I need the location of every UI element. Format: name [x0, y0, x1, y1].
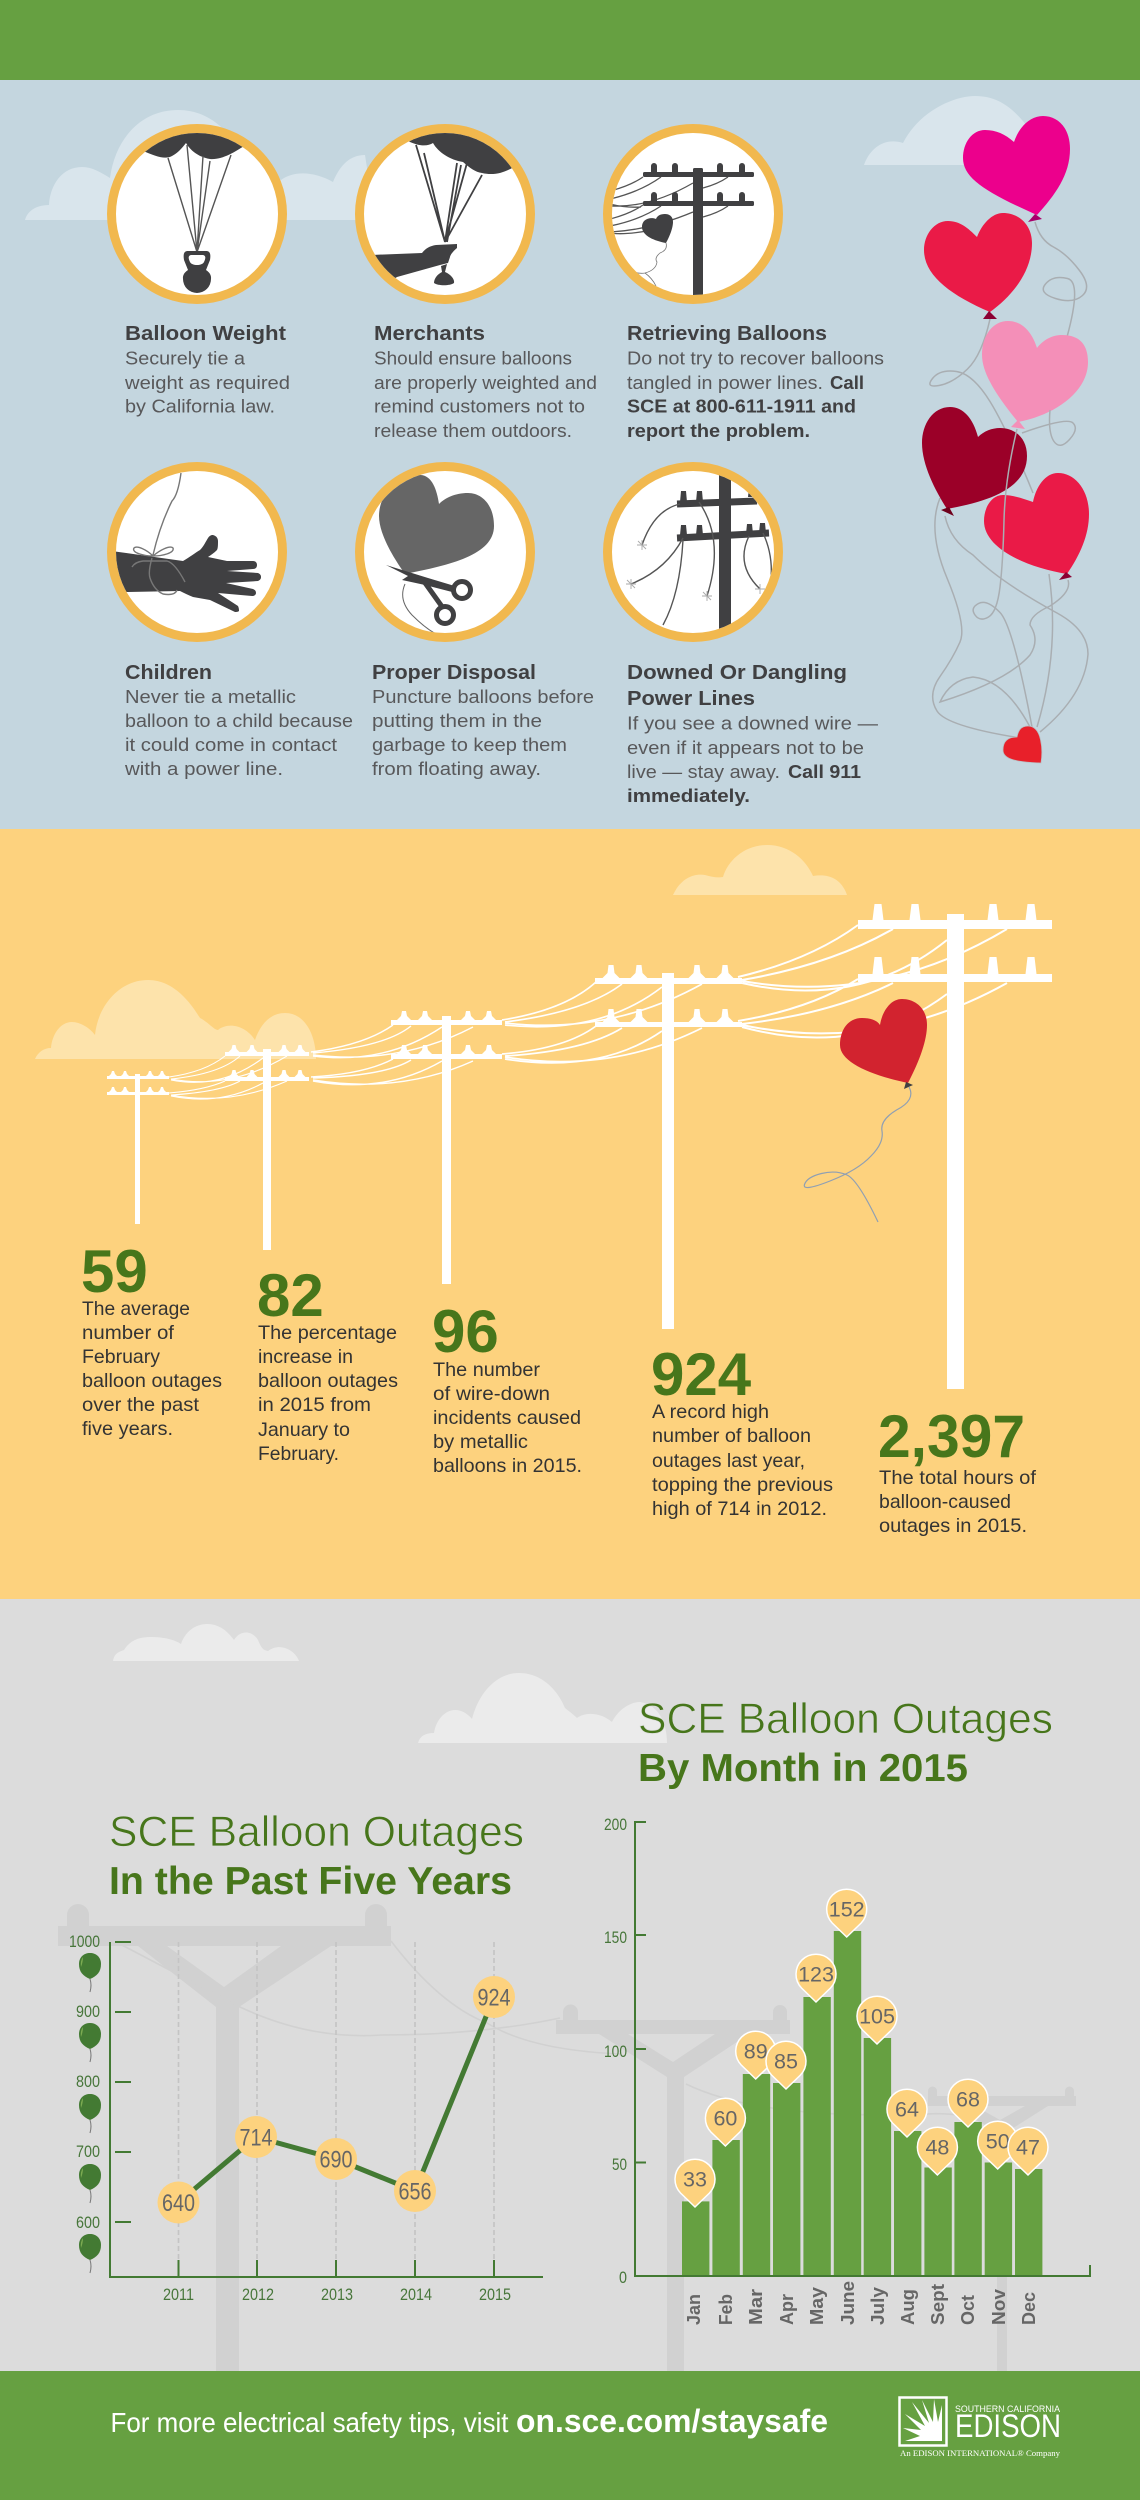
data point markers: 924 — [478, 1984, 510, 2012]
stat: 59: February — [82, 1346, 160, 1368]
balloon: dark red heart — [922, 407, 1027, 516]
heading — [627, 661, 847, 710]
value pins: 105 — [859, 2004, 895, 2028]
month labels: June — [838, 2281, 858, 2325]
stat: 82: balloon outages — [258, 1370, 398, 1392]
x axis labels: 2014 — [400, 2285, 432, 2304]
stat: 82 — [257, 1262, 398, 1465]
stat: 2,397: 2,397 — [878, 1403, 1025, 1470]
panel: balloon safety tips — [0, 80, 1140, 829]
body text — [627, 348, 884, 441]
body text: are properly weighted and — [374, 372, 597, 393]
stat: 96 — [432, 1298, 582, 1477]
stat: 924: A record high — [652, 1401, 769, 1423]
body text — [124, 348, 290, 416]
cloud: upper — [673, 845, 847, 895]
y axis labels: 800 — [76, 2072, 100, 2091]
data point markers: 714 — [240, 2124, 272, 2152]
stat: 82: 82 — [257, 1262, 324, 1329]
value pins: 89 — [744, 2040, 768, 2064]
month labels: May — [807, 2287, 827, 2325]
power pole 5 — [858, 904, 1052, 1389]
body text: balloon to a child because — [125, 710, 353, 731]
logo: Southern California Edison: SOUTHERN CALIFORNIA — [955, 2404, 1060, 2414]
body text: even if it appears not to be — [627, 737, 864, 758]
icon: pole with dangling wires — [626, 470, 771, 635]
cloud: left — [35, 980, 316, 1059]
x axis labels: 2011 — [163, 2285, 194, 2304]
gridlines — [178, 1942, 494, 2262]
month labels: Oct — [958, 2295, 978, 2325]
month labels: Nov — [989, 2289, 1009, 2325]
body text: release them outdoors. — [374, 420, 572, 441]
value pins: 60 — [713, 2106, 737, 2130]
balloon: red heart — [924, 213, 1032, 319]
y axis labels: 700 — [76, 2142, 100, 2161]
month labels: Mar — [746, 2289, 766, 2325]
body text: If you see a downed wire — — [627, 712, 879, 734]
cloud: upper left — [113, 1624, 299, 1661]
y axis labels: 600 — [76, 2213, 100, 2232]
body text: immediately. — [627, 785, 750, 806]
value pins: 33 — [683, 2168, 707, 2192]
axes — [635, 1822, 1090, 2276]
icon: heart balloon tangled on power pole — [610, 163, 754, 302]
heading: Power Lines — [627, 687, 755, 710]
stat: 59: 59 — [81, 1238, 148, 1305]
balloon: red heart lower — [984, 473, 1089, 580]
body text: Do not try to recover balloons — [627, 348, 884, 368]
value pins: 123 — [798, 1962, 834, 1986]
icons: green balloons — [79, 1953, 101, 2273]
body text: Securely tie a — [125, 348, 246, 368]
value pins: 50 — [986, 2130, 1010, 2154]
stat: 82: The percentage — [258, 1322, 397, 1344]
title: In the Past Five Years — [109, 1860, 512, 1903]
title: SCE Balloon Outages — [109, 1808, 524, 1856]
balloon: magenta heart — [963, 116, 1070, 222]
title: SCE Balloon Outages — [638, 1695, 1053, 1743]
data point markers: 690 — [320, 2146, 352, 2174]
body text: garbage to keep them — [372, 734, 567, 755]
stat: 924 — [651, 1341, 833, 1520]
stat: 2,397 — [878, 1403, 1037, 1537]
body text: report the problem. — [627, 420, 810, 441]
tip: downed power lines — [608, 466, 879, 806]
y axis labels — [604, 1815, 627, 2287]
stat: 96: of wire-down — [433, 1383, 550, 1405]
value pins: 48 — [925, 2136, 949, 2160]
body text: weight as required — [124, 372, 290, 393]
heading: Balloon Weight — [125, 322, 286, 345]
cloud: left — [25, 110, 375, 220]
stat: 59: number of — [82, 1322, 175, 1344]
heading: Children — [125, 661, 212, 684]
data point markers — [158, 1976, 515, 2224]
cloud: center — [418, 1673, 667, 1743]
x axis labels: 2012 — [242, 2285, 274, 2304]
tip: balloon weight — [112, 120, 290, 416]
value pins: 85 — [774, 2050, 798, 2074]
body text: live — stay away. — [627, 761, 780, 782]
stat: 2,397: outages in 2015. — [879, 1515, 1027, 1537]
tip: retrieving balloons — [608, 128, 884, 441]
background power poles — [58, 1904, 1076, 2371]
logo: Southern California Edison: An EDISON INTERNATIONAL® Company — [900, 2449, 1060, 2458]
value pins: 68 — [956, 2088, 980, 2112]
body text — [627, 712, 879, 806]
stat: 924: number of balloon — [652, 1425, 811, 1447]
body text: Never tie a metallic — [125, 686, 296, 707]
footer call to action: on.sce.com/staysafe — [516, 2403, 828, 2439]
icon: red heart balloon — [804, 999, 927, 1222]
value pins — [675, 1889, 1048, 2207]
month labels: Jan — [684, 2294, 704, 2325]
x axis labels — [163, 2285, 511, 2304]
month labels — [684, 2281, 1039, 2325]
heading: Proper Disposal — [372, 661, 536, 684]
y axis labels: 150 — [604, 1928, 627, 1947]
stat: 2,397: balloon-caused — [879, 1491, 1011, 1513]
stat: 59: balloon outages — [82, 1370, 222, 1392]
icon: hand holding balloons — [375, 133, 512, 286]
data point markers: 656 — [398, 2178, 432, 2206]
stat: 96: balloons in 2015. — [433, 1455, 582, 1477]
body text — [124, 686, 353, 779]
body text — [372, 686, 594, 779]
title — [109, 1808, 524, 1903]
icon: scissors puncturing heart balloon — [379, 475, 494, 634]
heading: Retrieving Balloons — [627, 322, 827, 345]
y axis labels: 900 — [76, 2002, 100, 2021]
tip: merchants — [360, 120, 597, 441]
power pole 4 — [595, 965, 742, 1329]
footer call to action: For more electrical safety tips, visit — [110, 2407, 509, 2438]
line series — [178, 1997, 494, 2202]
y axis labels: 0 — [619, 2268, 627, 2287]
y axis labels: 50 — [612, 2155, 627, 2174]
body text: it could come in contact — [125, 734, 337, 755]
body text: with a power line. — [124, 758, 283, 779]
x axis labels: 2013 — [321, 2285, 353, 2304]
y axis labels: 100 — [604, 2042, 627, 2061]
icon: balloon string tied to child's hand — [110, 473, 261, 612]
stat: 96: 96 — [432, 1298, 499, 1365]
value pins: 47 — [1016, 2136, 1040, 2160]
stat: 924: 924 — [651, 1341, 752, 1408]
month labels: Feb — [716, 2294, 736, 2325]
stat: 59: over the past — [82, 1394, 200, 1416]
balloon: pink heart — [982, 321, 1088, 429]
body text: Should ensure balloons — [374, 348, 572, 368]
small red heart weight — [1003, 726, 1042, 763]
balloon strings — [930, 222, 1088, 739]
body text: remind customers not to — [374, 396, 585, 416]
stat: 59 — [81, 1238, 222, 1440]
month labels: Sept — [928, 2284, 948, 2325]
chart: outages by month in 2015 — [604, 1695, 1090, 2325]
power pole 3 — [391, 1011, 502, 1284]
value pins: 152 — [829, 1898, 865, 1922]
axes — [110, 1942, 543, 2277]
stat: 96: by metallic — [433, 1431, 528, 1453]
logo: Southern California Edison — [900, 2398, 1061, 2458]
stat: 82: January to — [258, 1419, 350, 1441]
cloud: right — [864, 96, 1030, 165]
month labels: July — [868, 2287, 888, 2325]
title: By Month in 2015 — [638, 1747, 968, 1790]
chart: outages in the past five years — [69, 1808, 543, 2304]
icon: balloons with kettlebell weight — [145, 133, 242, 293]
data point markers: 640 — [162, 2190, 195, 2217]
stat: 924: outages last year, — [652, 1450, 805, 1472]
footer band — [0, 2371, 1140, 2500]
month labels: Apr — [777, 2294, 797, 2325]
tip: proper disposal — [360, 466, 594, 779]
body text: Call — [830, 372, 864, 393]
panel: outage statistics — [0, 829, 1140, 1599]
tip: children — [110, 466, 353, 779]
footer call to action — [110, 2403, 828, 2439]
y axis labels — [69, 1932, 100, 2232]
heading: Merchants — [374, 322, 485, 345]
y axis labels: 1000 — [69, 1932, 100, 1951]
body text: tangled in power lines. — [627, 372, 823, 393]
stat: 96: The number — [433, 1359, 541, 1381]
value pins: 64 — [895, 2098, 919, 2122]
stat: 59: The average — [82, 1298, 190, 1320]
body text: putting them in the — [372, 710, 542, 731]
month labels: Aug — [898, 2289, 918, 2325]
power pole 2 — [225, 1045, 309, 1250]
x axis labels: 2015 — [479, 2285, 511, 2304]
body text: by California law. — [125, 396, 275, 416]
body text: from floating away. — [372, 758, 541, 779]
body text — [374, 348, 597, 441]
panel: outage charts — [0, 1599, 1140, 2371]
body text: SCE at 800-611-1911 and — [627, 396, 856, 416]
y axis labels: 200 — [604, 1815, 627, 1834]
stat: 82: February. — [258, 1443, 339, 1465]
stat: 924: topping the previous — [652, 1474, 833, 1496]
stat: 96: incidents caused — [433, 1407, 581, 1429]
body text: Call 911 — [788, 761, 861, 782]
title — [638, 1695, 1053, 1790]
stat: 59: five years. — [82, 1418, 173, 1440]
power lines between poles — [738, 925, 1007, 1038]
month labels: Dec — [1019, 2292, 1039, 2325]
bars — [682, 1931, 1042, 2276]
top green band — [0, 0, 1140, 80]
power pole 1 — [107, 1071, 169, 1224]
heading: Downed Or Dangling — [627, 661, 847, 684]
stat: 82: in 2015 from — [258, 1394, 371, 1416]
stat: 924: high of 714 in 2012. — [652, 1498, 827, 1520]
stat: 82: increase in — [258, 1346, 353, 1368]
illustration: bunch of heart balloons — [922, 116, 1089, 763]
logo: Southern California Edison: EDISON — [955, 2408, 1061, 2444]
body text: Puncture balloons before — [372, 686, 594, 707]
stat: 2,397: The total hours of — [879, 1467, 1037, 1489]
strings over balloons — [973, 410, 1075, 727]
